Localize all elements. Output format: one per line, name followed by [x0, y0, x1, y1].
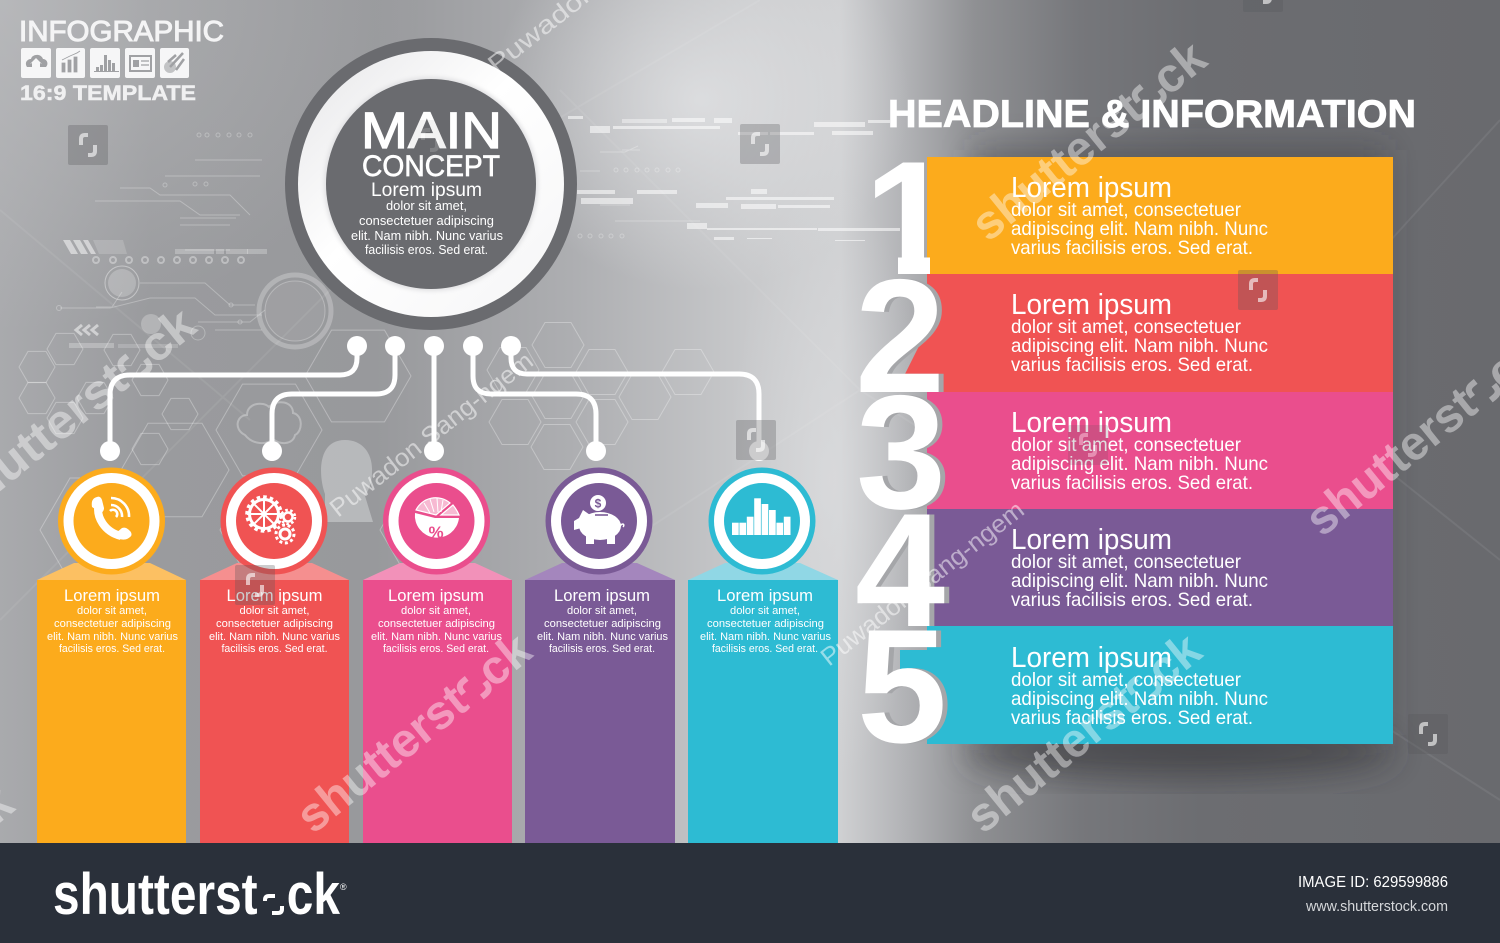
column 2: red — [200, 468, 349, 843]
column 3: pink — [363, 468, 512, 843]
row 5: teal: varius facilisis eros. Sed erat. — [1011, 707, 1253, 729]
column 3 text: Lorem ipsum — [388, 587, 484, 605]
row 4: purple — [927, 509, 1393, 627]
column 4 text: consectetuer adipiscing — [544, 618, 661, 630]
column 5 text: consectetuer adipiscing — [707, 618, 824, 630]
background icon: brain and head — [238, 402, 373, 522]
number 3: 3 — [856, 362, 946, 543]
footer image id: IMAGE ID: 629599886 — [1298, 874, 1448, 891]
main concept text: CONCEPT — [362, 150, 500, 183]
watermark: shutterstock text: shutterstock — [957, 623, 1212, 844]
main concept text: facilisis eros. Sed erat. — [365, 243, 488, 257]
main concept text: consectetuer adipiscing — [359, 214, 494, 228]
number 5: 5 — [862, 596, 952, 777]
row 5: teal: dolor sit amet, consectetuer — [1011, 669, 1241, 691]
row 4: purple: dolor sit amet, consectetuer — [1011, 551, 1241, 573]
footer bar — [0, 843, 1500, 943]
watermark: shutterstock text: shutterstock — [287, 623, 542, 844]
watermark: stamps — [68, 0, 1448, 754]
column 3 text — [371, 587, 502, 655]
footer logo: shutterstock — [53, 862, 341, 927]
number 5: 5 — [857, 596, 947, 777]
row 3: pink: varius facilisis eros. Sed erat. — [1011, 472, 1253, 494]
number 4: 4 — [855, 480, 945, 661]
row 2: red: dolor sit amet, consectetuer — [1011, 316, 1241, 338]
row 4: purple: varius facilisis eros. Sed erat. — [1011, 589, 1253, 611]
column 3 text: consectetuer adipiscing — [378, 618, 495, 630]
watermark: author text: Puwadon Sang-ngem — [815, 496, 1030, 672]
column 4 text: elit. Nam nibh. Nunc varius — [537, 631, 668, 643]
main concept text — [351, 102, 503, 257]
column 5 text: facilisis eros. Sed erat. — [712, 643, 818, 655]
column 5 text — [700, 587, 831, 655]
row 2: red: adipiscing elit. Nam nibh. Nunc — [1011, 335, 1268, 357]
row 2: red: varius facilisis eros. Sed erat. — [1011, 354, 1253, 376]
connector lines — [110, 346, 759, 451]
row 1: orange: adipiscing elit. Nam nibh. Nunc — [1011, 218, 1268, 240]
column 3 text: elit. Nam nibh. Nunc varius — [371, 631, 502, 643]
row 1: orange: dolor sit amet, consectetuer — [1011, 199, 1241, 221]
main concept text: Lorem ipsum — [371, 180, 482, 201]
row 3: pink: adipiscing elit. Nam nibh. Nunc — [1011, 453, 1268, 475]
number 3: 3 — [861, 362, 951, 543]
icon: pie chart — [383, 468, 490, 574]
row 3: pink: Lorem ipsum — [1011, 407, 1172, 439]
column 2 text: facilisis eros. Sed erat. — [222, 643, 328, 655]
background pattern: circuit lines — [56, 133, 700, 347]
template label: 16:9 TEMPLATE — [20, 82, 196, 105]
column 4 text: dolor sit amet, — [567, 605, 637, 617]
row 2: red: Lorem ipsum — [1011, 289, 1172, 321]
background pattern: light bars — [63, 116, 900, 348]
number 2: 2 — [860, 246, 950, 427]
column 2 text: Lorem ipsum — [226, 587, 322, 605]
main concept circle — [285, 38, 577, 330]
row 3: pink: dolor sit amet, consectetuer — [1011, 434, 1241, 456]
row 1: orange: Lorem ipsum — [1011, 172, 1172, 204]
row 1: orange — [927, 157, 1393, 275]
row 4: purple: Lorem ipsum — [1011, 524, 1172, 556]
row 2: red — [905, 274, 1393, 392]
watermark: shutterstock text: shutterstock — [962, 31, 1217, 252]
column 5 text: Lorem ipsum — [717, 587, 813, 605]
row 4: purple: adipiscing elit. Nam nibh. Nunc — [1011, 570, 1268, 592]
number 4: 4 — [860, 480, 950, 661]
icon: bar chart — [708, 468, 816, 574]
headline: HEADLINE & INFORMATION — [888, 93, 1416, 136]
icon: piggy bank: $ — [595, 496, 602, 510]
column 3 text: dolor sit amet, — [401, 605, 471, 617]
main concept text: dolor sit amet, — [386, 199, 467, 213]
footer logo: ® — [340, 882, 347, 892]
column 1: orange — [37, 468, 186, 843]
column 2 text: elit. Nam nibh. Nunc varius — [209, 631, 340, 643]
icon row — [21, 48, 189, 78]
template title block — [19, 16, 224, 105]
background pattern: hexagons — [19, 322, 714, 582]
row 5: teal: adipiscing elit. Nam nibh. Nunc — [1011, 688, 1268, 710]
column 2 text — [209, 587, 340, 655]
column 5 text: dolor sit amet, — [730, 605, 800, 617]
connector dots — [100, 336, 769, 461]
column 4 text — [537, 587, 668, 655]
icon: phone — [58, 468, 165, 574]
column 5: teal — [688, 468, 838, 843]
footer url: www.shutterstock.com — [1305, 899, 1448, 915]
column 1 text: consectetuer adipiscing — [54, 618, 171, 630]
column 3 text: facilisis eros. Sed erat. — [383, 643, 489, 655]
row 5: teal — [900, 626, 1393, 744]
row 5: teal: Lorem ipsum — [1011, 642, 1172, 674]
column 1 text: dolor sit amet, — [77, 605, 147, 617]
icon: piggy bank — [546, 468, 652, 574]
column 1 text: elit. Nam nibh. Nunc varius — [47, 631, 178, 643]
column 5 text: elit. Nam nibh. Nunc varius — [700, 631, 831, 643]
row 3: pink — [927, 392, 1393, 510]
row 1: orange: varius facilisis eros. Sed erat. — [1011, 237, 1253, 259]
main concept text: MAIN — [361, 102, 502, 159]
icon: pie chart: % — [428, 523, 444, 542]
infographic title: INFOGRAPHIC — [19, 16, 224, 48]
column 4 text: Lorem ipsum — [554, 587, 650, 605]
icon: gears — [220, 468, 328, 574]
column 4 text: facilisis eros. Sed erat. — [549, 643, 655, 655]
column 2 text: consectetuer adipiscing — [216, 618, 333, 630]
watermark: author text: Puwadon Sang-ngem — [324, 347, 539, 523]
column 1 text: facilisis eros. Sed erat. — [59, 643, 165, 655]
shadow behind table — [965, 150, 1395, 778]
main concept text: elit. Nam nibh. Nunc varius — [351, 229, 503, 243]
number 2: 2 — [855, 246, 945, 427]
column 4: purple — [525, 468, 675, 843]
number 1: 1 — [864, 128, 954, 309]
column 2 text: dolor sit amet, — [240, 605, 310, 617]
column 1 text: Lorem ipsum — [64, 587, 160, 605]
watermark: author text — [324, 0, 1030, 672]
column 1 text — [47, 587, 178, 655]
